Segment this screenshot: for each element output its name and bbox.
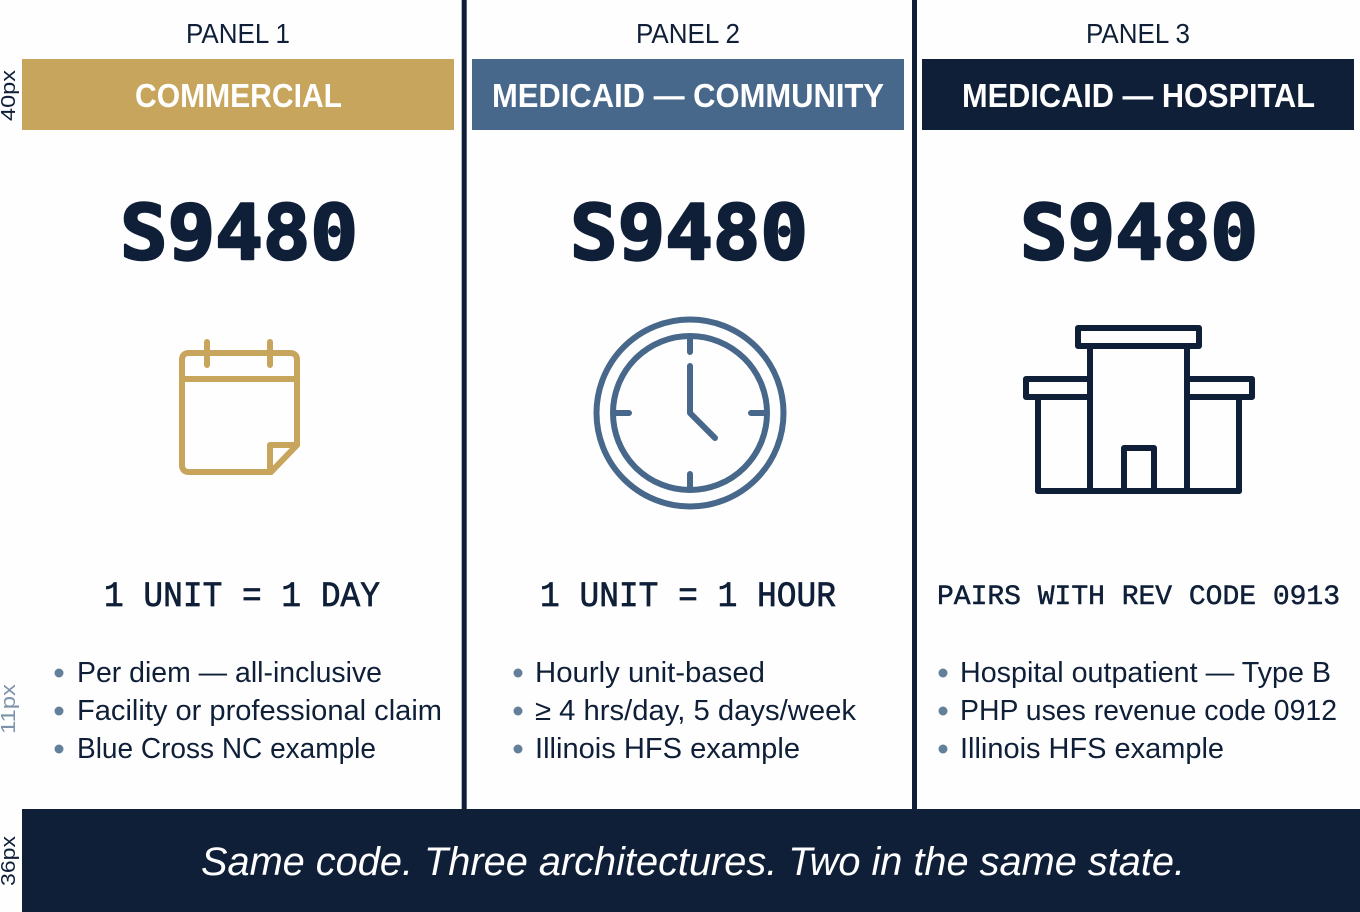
bullet list: hospital — [938, 657, 1337, 765]
banner: medicaid hospital — [922, 59, 1354, 130]
unit rule: 1 unit = 1 day: 1 UNIT = 1 DAY — [104, 577, 380, 617]
bullet list: community — [514, 657, 857, 765]
rule: pairs with rev code 0913: PAIRS WITH REV CODE 0913 — [937, 582, 1340, 613]
banner: medicaid hospital: MEDICAID — HOSPITAL — [962, 77, 1315, 114]
code: S9480: S9480 — [1020, 188, 1258, 277]
panel 3 label: PANEL 3 — [1086, 18, 1190, 49]
code: S9480: S9480 — [120, 188, 358, 277]
icon: hospital building — [1026, 328, 1252, 491]
icon: clock — [596, 320, 784, 506]
banner: medicaid community — [472, 59, 904, 130]
footer banner: Same code. Three architectures. Two in the same state. — [201, 840, 1185, 884]
banner: commercial — [22, 59, 454, 130]
code: S9480: S9480 — [570, 188, 808, 277]
banner: medicaid community: MEDICAID — COMMUNITY — [492, 77, 884, 114]
bullet list: hospital: Hospital outpatient — Type B — [960, 657, 1331, 689]
unit rule: 1 unit = 1 hour: 1 UNIT = 1 HOUR — [540, 577, 836, 617]
panel 1 label: PANEL 1 — [186, 18, 290, 49]
bullet list: commercial — [54, 657, 442, 765]
bullet list: hospital: PHP uses revenue code 0912 — [960, 695, 1337, 727]
bullet list: community: Hourly unit-based — [535, 657, 765, 689]
bullet list: commercial: Facility or professional claim — [77, 695, 442, 727]
bullet list: community: Illinois HFS example — [535, 733, 800, 765]
panel 2 label: PANEL 2 — [636, 18, 740, 49]
bullet list: commercial: Blue Cross NC example — [77, 733, 376, 765]
bullet list: hospital: Illinois HFS example — [960, 733, 1224, 765]
panel: medicaid community — [472, 18, 904, 765]
icon: calendar — [182, 342, 297, 472]
panel: commercial — [22, 18, 454, 765]
footer banner — [22, 809, 1360, 912]
bullet list: community: ≥ 4 hrs/day, 5 days/week — [535, 695, 857, 727]
panel: medicaid hospital — [922, 18, 1354, 765]
bullet list: commercial: Per diem — all-inclusive — [77, 657, 382, 689]
banner: commercial: COMMERCIAL — [135, 77, 342, 114]
